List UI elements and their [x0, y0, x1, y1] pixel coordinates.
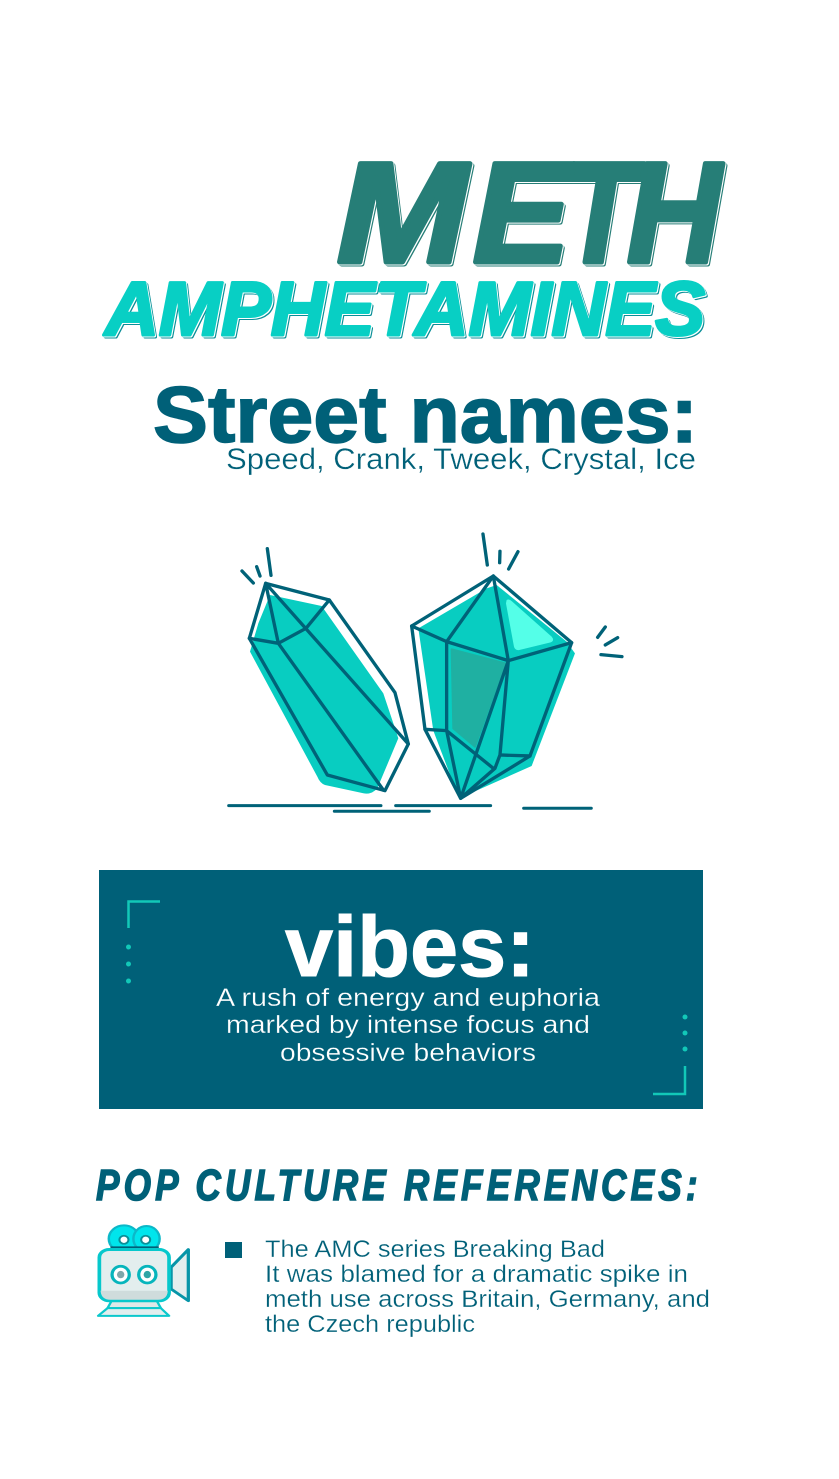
- subtitle: AMPHETAMINES: AMPHETAMINES: [103, 267, 705, 352]
- pop culture text: [265, 1236, 710, 1338]
- pop culture text: meth use across Britain, Germany, and: [265, 1286, 710, 1313]
- vibes heading: vibes:: [285, 900, 535, 995]
- sparkle lines: [242, 534, 622, 657]
- left crystal: [249, 583, 408, 794]
- corner mark bottom-right: [653, 1066, 685, 1094]
- corner mark top-left: [128, 902, 160, 928]
- pop culture text: The AMC series Breaking Bad: [265, 1236, 605, 1263]
- illustration: crystals: [229, 534, 622, 811]
- ground lines: [229, 806, 591, 811]
- vibes description: marked by intense focus and: [226, 1011, 590, 1039]
- title: METH: T: [563, 134, 645, 293]
- title: METH: M: [337, 134, 470, 293]
- heading: street names: Street names:: [153, 370, 698, 459]
- title: METH: H: [627, 134, 723, 293]
- icon: movie camera: [98, 1225, 188, 1316]
- dots right: [682, 1014, 688, 1052]
- bullet: [225, 1242, 242, 1258]
- vibes description: obsessive behaviors: [280, 1039, 536, 1067]
- pop culture text: It was blamed for a dramatic spike in: [265, 1261, 688, 1288]
- pop culture text: the Czech republic: [265, 1311, 475, 1338]
- heading: pop culture references: POP CULTURE REFERENCES:: [96, 1161, 698, 1210]
- vibes description: A rush of energy and euphoria: [216, 984, 600, 1012]
- dots left: [126, 944, 131, 984]
- right crystal: [412, 576, 575, 798]
- title: METH: E: [473, 134, 574, 293]
- vibes description: [216, 984, 600, 1067]
- panel: vibes: [99, 870, 703, 1109]
- street names list: Speed, Crank, Tweek, Crystal, Ice: [226, 443, 696, 476]
